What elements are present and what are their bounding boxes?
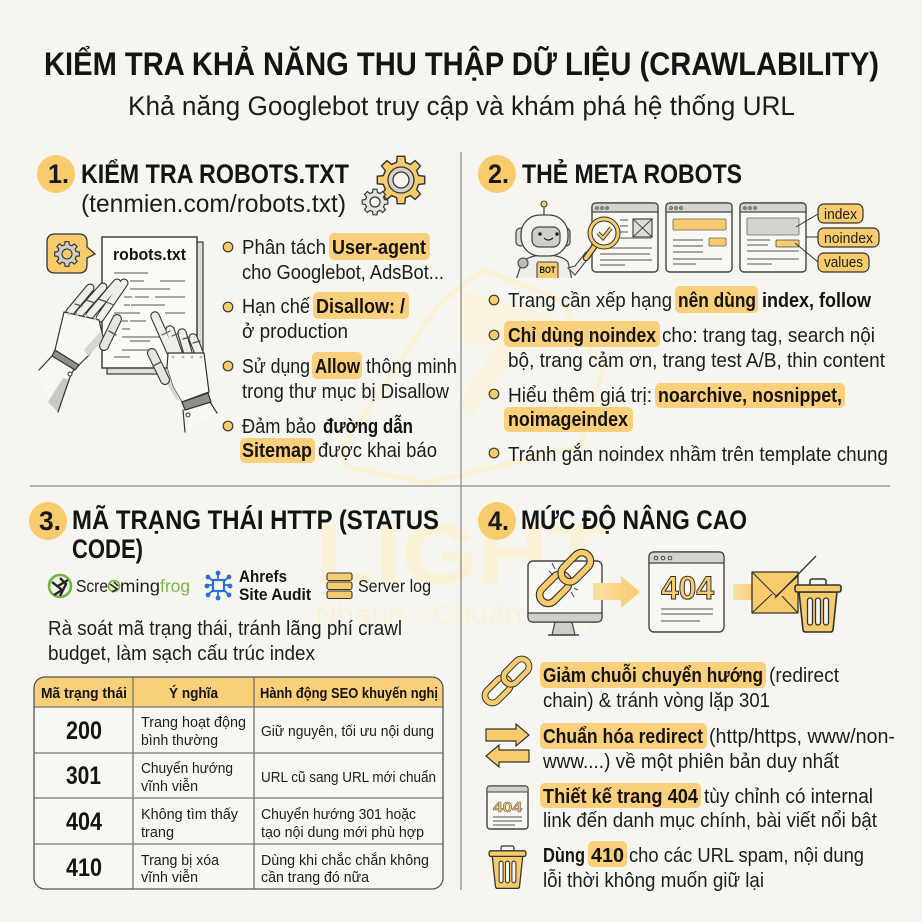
table: status codes: Giữ nguyên, tối ưu nội dung xyxy=(261,723,434,740)
table: status codes: tạo nội dung mới phù hợp xyxy=(261,824,424,841)
icon: gear speech bubble xyxy=(47,234,95,273)
heading: section 4: MỨC ĐỘ NÂNG CAO xyxy=(521,505,747,535)
browser windows xyxy=(592,203,806,272)
illustration: robot inspecting pages xyxy=(516,201,879,282)
tags: index noindex values: noindex xyxy=(824,231,874,247)
illustration: redirect to 404 to trash xyxy=(528,549,841,635)
bullets: robots.txt: thông minh xyxy=(366,355,457,378)
bullets: robots.txt: Đảm bảo xyxy=(242,415,316,438)
logo: Ahrefs Site Audit: Ahrefs xyxy=(239,568,287,586)
table: status codes: 200 xyxy=(66,717,102,745)
heading: section 3: MÃ TRẠNG THÁI HTTP (STATUS xyxy=(72,505,439,535)
bullets: meta robots: Trang cần xếp hạng xyxy=(508,289,672,312)
heading: section 2 xyxy=(478,155,742,193)
robot: BOT xyxy=(540,265,556,275)
item: normalise redirect: www....) về một phiên bản duy nhất xyxy=(542,750,839,773)
description: Rà soát mã trạng thái, tránh lãng phí crawl xyxy=(48,617,402,640)
table: status codes: 301 xyxy=(66,762,101,790)
bullets: meta robots: noarchive, nosnippet, xyxy=(658,384,842,407)
item: normalise redirect xyxy=(486,723,895,773)
heading: section 1: (tenmien.com/robots.txt) xyxy=(81,190,346,218)
bullets: robots.txt: Disallow: / xyxy=(316,295,405,318)
heading: section 2: 2. xyxy=(488,159,509,189)
bullets: robots.txt: Phân tách xyxy=(242,236,326,259)
item: redirect chain: Giảm chuỗi chuyển hướng xyxy=(543,663,763,687)
panel: 4 advanced xyxy=(478,502,895,892)
logo: Screaming Frog xyxy=(49,575,190,597)
item: redirect chain: chain) & tránh vòng lặp 301 xyxy=(543,689,770,712)
tags: index noindex values xyxy=(795,204,879,272)
panel: 3 HTTP status codes xyxy=(29,502,443,889)
bullets: robots.txt: đường dẫn xyxy=(323,414,413,438)
table: status codes: URL cũ sang URL mới chuẩn xyxy=(261,769,436,786)
logo: Ahrefs Site Audit xyxy=(205,568,311,604)
description xyxy=(48,617,402,665)
item: use 410: cho các URL spam, nội dung xyxy=(629,844,864,867)
bullets: meta robots: Tránh gắn noindex nhầm trên template chung xyxy=(508,443,888,466)
tags: index noindex values: values xyxy=(824,255,863,271)
heading: section 4 xyxy=(478,502,747,540)
logo: Screaming Frog: Scre xyxy=(76,576,108,596)
bullets: meta robots: Hiểu thêm giá trị: xyxy=(508,384,652,407)
item: custom 404: link đến danh mục chính, bài viết nổi bật xyxy=(543,809,877,832)
item: use 410: 410 xyxy=(591,844,624,867)
icon: monitor with broken chain xyxy=(528,549,602,635)
icon: gears xyxy=(362,156,425,215)
bullets: robots.txt: ở production xyxy=(242,320,348,343)
logo: Screaming Frog: frog xyxy=(160,576,190,596)
bullets: robots.txt: được khai báo xyxy=(318,439,437,462)
table: status codes: Chuyển hướng xyxy=(141,760,233,777)
table: status codes: 404 xyxy=(66,808,102,836)
table: status codes: vĩnh viễn xyxy=(141,869,198,886)
arrow xyxy=(593,576,640,608)
heading: section 3: CODE) xyxy=(72,534,143,564)
table: status codes: bình thường xyxy=(141,732,218,749)
bullets: meta robots: index, follow xyxy=(762,289,871,312)
table: status codes: Không tìm thấy xyxy=(141,806,238,823)
illustration: robot hands on robots.txt xyxy=(39,234,217,432)
watermark: LIGHT logo xyxy=(315,270,607,629)
bullets: robots.txt: trong thư mục bị Disallow xyxy=(242,380,449,403)
heading: section 2: THẺ META ROBOTS xyxy=(522,159,742,189)
bullets: meta robots: nên dùng xyxy=(678,289,756,312)
table: status codes: Chuyển hướng 301 hoặc xyxy=(261,806,416,823)
table: status codes: Trang hoạt động xyxy=(141,714,246,731)
item: normalise redirect: Chuẩn hóa redirect xyxy=(543,725,703,748)
icon: 404 window: 404 xyxy=(661,570,714,606)
robot xyxy=(516,201,590,282)
bullets: robots.txt: Allow xyxy=(315,355,360,378)
icon: server log: Server log xyxy=(358,576,431,596)
document: robots.txt xyxy=(113,245,186,264)
tags: index noindex values: index xyxy=(824,207,858,223)
left robot hand xyxy=(39,283,124,412)
item: redirect chain xyxy=(482,656,839,712)
heading: section 3 xyxy=(29,502,439,564)
description: budget, làm sạch cấu trúc index xyxy=(48,642,316,665)
logo: Ahrefs Site Audit: Site Audit xyxy=(239,586,311,604)
panel: 2 meta robots xyxy=(478,155,888,466)
table: status codes: Dùng khi chắc chắn không xyxy=(261,852,429,869)
heading: section 1 xyxy=(37,155,349,218)
item: custom 404: 404 xyxy=(493,799,523,816)
bullets: robots.txt: Hạn chế xyxy=(242,295,311,318)
bullets: meta robots: bộ, trang cảm ơn, trang test A/B, thin content xyxy=(508,349,885,372)
panel: 1 robots.txt xyxy=(37,155,457,463)
table: status codes: Mã trạng thái xyxy=(41,685,127,702)
table: status codes: vĩnh viễn xyxy=(141,778,198,795)
bullets: robots.txt xyxy=(223,233,457,463)
bullets: robots.txt: Sitemap xyxy=(242,439,312,462)
item: use 410: Dùng xyxy=(543,844,585,867)
icon: trash xyxy=(795,579,841,632)
document xyxy=(102,237,203,374)
table: status codes: Ý nghĩa xyxy=(169,684,219,702)
icon: magnifier xyxy=(586,219,618,258)
bullets: meta robots: noimageindex xyxy=(508,408,629,431)
right robot hand xyxy=(152,316,217,432)
table: status codes xyxy=(34,677,443,889)
logo: Screaming Frog: ming xyxy=(120,576,160,596)
table: status codes: Hành động SEO khuyến nghị xyxy=(260,685,438,702)
bullets: meta robots: Chỉ dùng noindex xyxy=(508,324,657,347)
heading: section 1: 1. xyxy=(48,159,69,189)
item: redirect chain: (redirect xyxy=(769,664,839,687)
bullets: meta robots: cho: trang tag, search nội xyxy=(662,324,875,347)
icon: server log xyxy=(327,573,431,598)
table: status codes: trang xyxy=(141,824,174,841)
item: normalise redirect: (http/https, www/non- xyxy=(709,725,895,748)
watermark: LIGHT logo: Nhanh - Chuẩn - Đẹp xyxy=(315,599,605,629)
icon: 404 window xyxy=(649,552,724,632)
subtitle: Khả năng Googlebot truy cập và khám phá hệ thống URL xyxy=(128,91,795,121)
bullets: robots.txt: Sử dụng xyxy=(242,355,310,378)
heading: section 3: 3. xyxy=(39,506,61,536)
item: custom 404 xyxy=(487,783,877,832)
watermark: LIGHT logo: LIGHT xyxy=(315,507,607,601)
table: status codes: Trang bị xóa xyxy=(141,852,220,869)
bullets: robots.txt: User-agent xyxy=(332,236,426,259)
heading: section 4: 4. xyxy=(488,506,509,536)
heading: section 1: KIỂM TRA ROBOTS.TXT xyxy=(81,159,349,189)
item: use 410: lỗi thời không muốn giữ lại xyxy=(543,869,764,892)
item: use 410 xyxy=(489,841,864,892)
table: status codes: 410 xyxy=(66,854,102,882)
arrow and envelope xyxy=(733,556,816,613)
item: custom 404: tùy chỉnh có internal xyxy=(704,785,873,808)
item: custom 404: Thiết kế trang 404 xyxy=(543,785,699,808)
bullets: meta robots xyxy=(489,286,888,466)
table: status codes: cần trang đó nữa xyxy=(261,869,370,886)
bullets: robots.txt: cho Googlebot, AdsBot... xyxy=(242,261,444,284)
